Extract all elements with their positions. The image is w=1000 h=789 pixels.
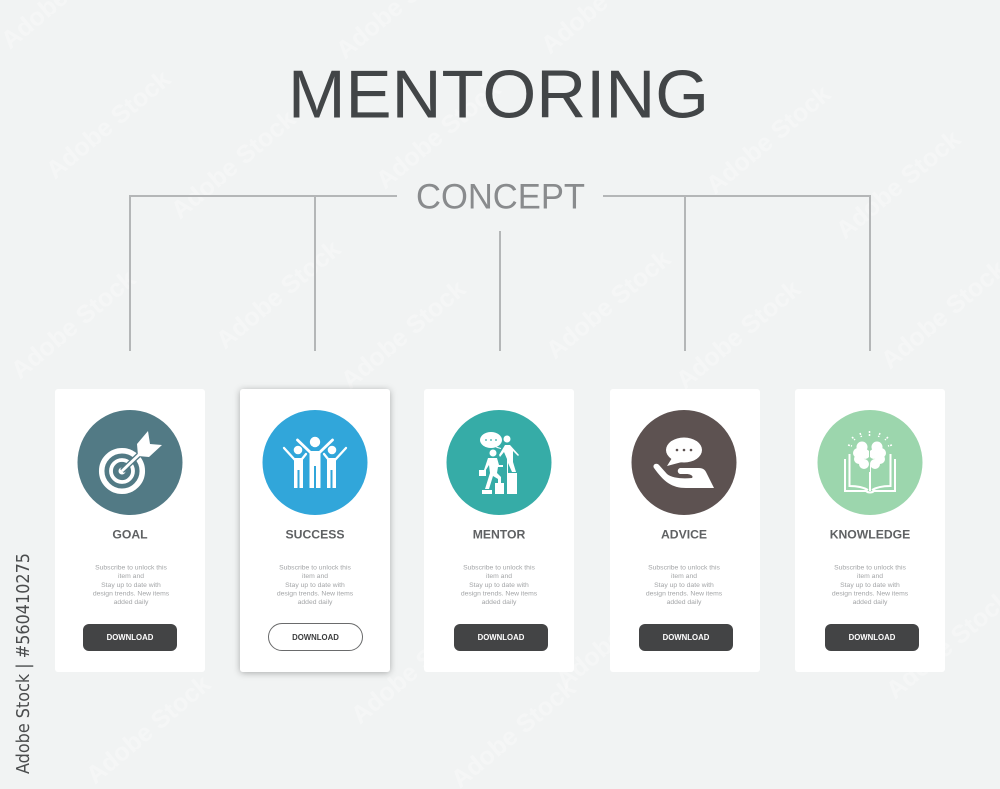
text: goal description: Subscribe to unlock this [95, 564, 167, 572]
subtitle: CONCEPT [416, 178, 585, 216]
panel: knowledge [795, 389, 945, 672]
heading: mentor: MENTOR [473, 528, 525, 542]
button: download: DOWNLOAD [849, 633, 896, 642]
text: knowledge description: Stay up to date with [840, 582, 900, 589]
text: advice description: Stay up to date with [654, 582, 714, 589]
text: success description: design trends. New items [277, 590, 354, 598]
panel: advice [610, 389, 760, 672]
watermark pattern: Adobe Stock [541, 245, 676, 365]
watermark pattern: Adobe Stock [6, 265, 141, 385]
watermark pattern: Adobe Stock [831, 125, 966, 245]
watermark pattern: Adobe Stock [336, 275, 471, 395]
button: download outline: DOWNLOAD [292, 633, 339, 642]
text: knowledge description: Subscribe to unlock this [834, 564, 906, 572]
watermark pattern: Adobe Stock [671, 275, 806, 395]
button: download: DOWNLOAD [663, 633, 710, 642]
text: success description: item and [302, 573, 328, 580]
button: download [825, 624, 919, 651]
text: mentor description: item and [486, 573, 512, 580]
watermark pattern: Adobe Stock [371, 75, 506, 195]
icon: brain over open book [818, 410, 922, 515]
text: advice description: design trends. New items [646, 590, 723, 598]
watermark pattern: Adobe Stock [701, 80, 836, 200]
text: knowledge description: item and [857, 573, 883, 580]
panel: mentor [424, 389, 574, 672]
watermark pattern: Adobe Stock [211, 235, 346, 355]
watermark pattern: Adobe Stock [551, 575, 686, 695]
icon: target with arrow [78, 410, 182, 515]
text: goal description: Stay up to date with [101, 582, 161, 589]
heading: goal: GOAL [112, 528, 148, 542]
text: goal description: design trends. New items [93, 590, 170, 598]
text: mentor description: design trends. New items [461, 590, 538, 598]
heading: knowledge: KNOWLEDGE [830, 528, 910, 542]
text: advice description: added daily [667, 599, 702, 606]
watermark pattern: Adobe Stock [81, 670, 216, 789]
text: success description: Subscribe to unlock this [279, 564, 351, 572]
button: download outline [268, 624, 362, 650]
icon: mentor helping climber [446, 410, 552, 515]
button: download [454, 624, 548, 651]
text: mentor description: Subscribe to unlock this [463, 564, 535, 572]
text: knowledge description: added daily [853, 599, 888, 606]
text: advice description: Subscribe to unlock this [648, 564, 720, 572]
watermark pattern: Adobe Stock [41, 65, 176, 185]
text: goal description: item and [118, 573, 144, 580]
text: knowledge description: design trends. New items [832, 590, 909, 598]
text: mentor description: Stay up to date with [469, 582, 529, 589]
icon: speech bubble over hand [632, 410, 736, 515]
watermark pattern: Adobe Stock [346, 610, 481, 730]
heading: advice: ADVICE [661, 528, 707, 542]
heading: success: SUCCESS [286, 528, 344, 542]
title: MENTORING [288, 56, 709, 132]
watermark pattern: Adobe Stock [166, 105, 301, 225]
text: goal description: added daily [114, 599, 149, 606]
button: download: DOWNLOAD [478, 633, 525, 642]
button: download: DOWNLOAD [107, 633, 154, 642]
panel: goal [55, 389, 205, 672]
text: success description: Stay up to date with [285, 582, 345, 589]
button: download [639, 624, 733, 651]
text: success description: added daily [298, 599, 333, 606]
stock id side label: Adobe Stock | #560410275 [13, 553, 34, 774]
icon: people celebrating [262, 410, 368, 515]
text: advice description: item and [671, 573, 697, 580]
panel: success [240, 389, 390, 672]
button: download [83, 624, 177, 651]
connector lines [130, 196, 870, 351]
text: mentor description: added daily [482, 599, 517, 606]
